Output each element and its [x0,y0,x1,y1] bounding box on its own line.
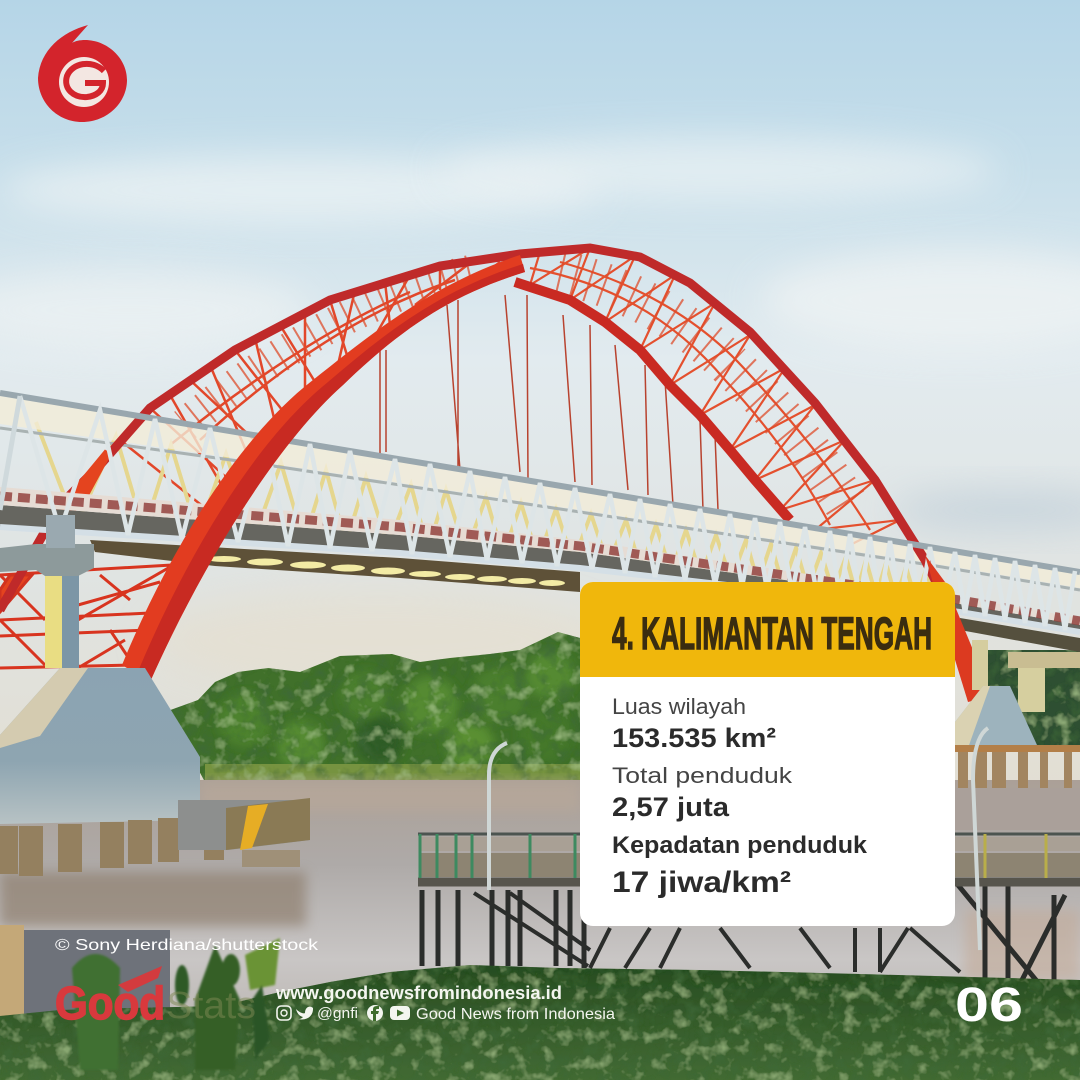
website and social handles: www.goodnewsfromindonesia.id [275,983,562,1003]
under deck with lights [90,540,1080,652]
dock with warning stripes [178,798,310,867]
statistics text: 153.535 km² [612,723,776,753]
front main arch rib [122,255,525,682]
lower left lattice [0,565,172,668]
website and social handles [275,983,615,1023]
logo top left [38,25,127,122]
deck white edge [0,527,1080,632]
right pier [972,640,1080,712]
right inner rib [515,282,790,520]
icon: instagram [277,1006,291,1020]
icon: youtube [390,1006,410,1020]
info card [580,582,955,926]
arch lattice: right span [530,248,900,545]
arch left rib lower orange section [60,452,108,520]
statistics text: Kepadatan penduduk [612,832,868,859]
far truss [36,422,936,603]
vegetation foreground [0,965,1080,1080]
right concrete arch base [955,686,1080,788]
photo credit: © Sony Herdiana/shutterstock [55,937,319,954]
deck railing [0,487,1080,625]
statistics text [612,694,868,899]
website and social handles: @gnfi [317,1005,358,1022]
statistics text: Total penduduk [612,763,793,788]
icon: twitter [296,1007,313,1019]
right arch lower leg [925,555,992,702]
left pier column and cap [0,515,94,668]
arch lattice: left span [120,262,500,520]
boardwalk with legs [418,834,1080,988]
GoodStats logo [55,966,256,1029]
river water [0,780,1080,1020]
lamp posts [489,728,988,950]
icon: facebook [367,1005,383,1021]
GoodStats logo: Stats [166,985,256,1027]
statistics text: 2,57 juta [612,792,730,822]
left foundation piles [0,818,224,876]
arch hangers [380,295,718,510]
left concrete arch base [0,668,200,824]
sky background [0,0,1080,800]
statistics text: Luas wilayah [612,694,746,719]
truss secondary chord [0,428,1080,590]
card header [580,582,955,677]
page number: 06 [955,979,1023,1032]
statistics text: 17 jiwa/km² [612,866,791,899]
plants left [72,938,280,1070]
truss roof panel [0,396,1080,588]
far treeline right [985,650,1080,745]
deck side band [0,505,1080,632]
GoodStats logo: Good [55,977,165,1029]
rear main arch rib [0,248,950,610]
near truss [0,393,1080,630]
website and social handles: Good News from Indonesia [416,1006,615,1023]
forest [165,632,580,784]
